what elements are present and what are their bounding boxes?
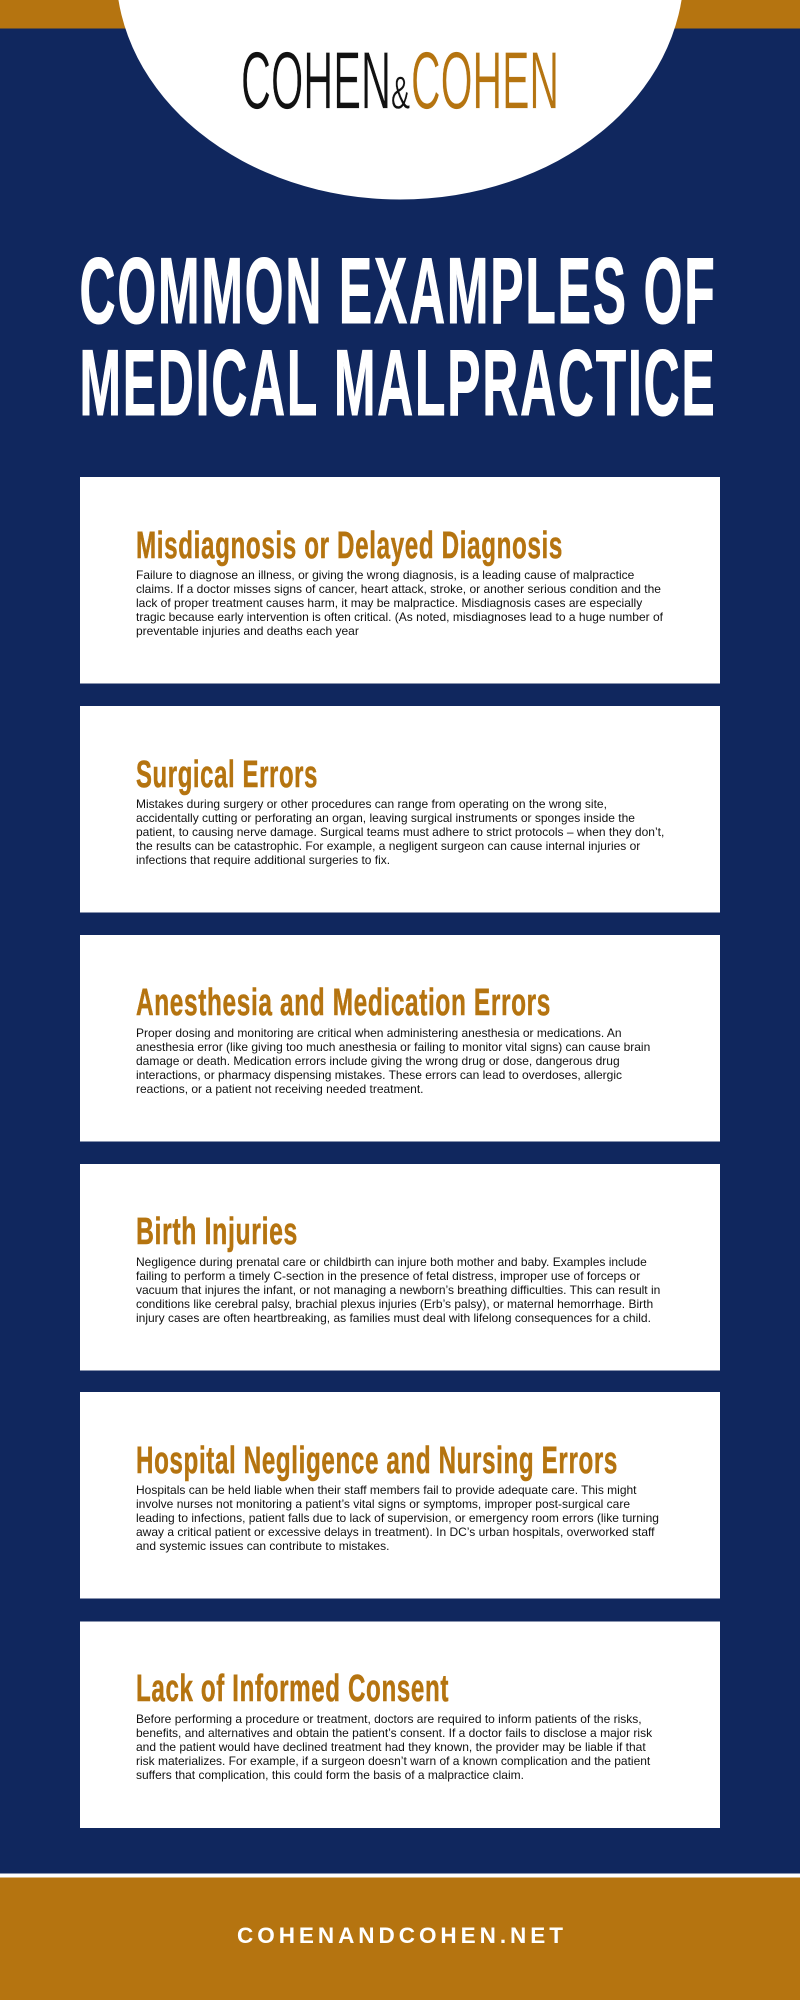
text: anesthesia — [136, 1026, 650, 1096]
text: hospital negligence: leading to infections, patient falls due to lack of supervision, or emergency room errors (like turning — [136, 1511, 659, 1525]
text: anesthesia: anesthesia error (like giving too much anesthesia or failing to monitor vital signs) can cause brain — [136, 1040, 650, 1054]
panel: misdiagnosis — [80, 477, 720, 684]
text: informed consent: risk materializes. For example, if a surgeon doesn’t warn of a known complication and the patient — [136, 1754, 651, 1768]
text: COHEN — [411, 36, 559, 126]
text: birth injuries — [136, 1255, 660, 1325]
heading: surgical errors: Surgical Errors — [136, 754, 318, 796]
logo: Cohen & Cohen: COHEN — [241, 36, 391, 126]
text: birth injuries: vacuum that injures the infant, or not managing a newborn’s breathing difficulties. This can result in — [136, 1283, 660, 1297]
text: misdiagnosis: tragic because early intervention is often critical. (As noted, misdiagnoses lead to a huge number of — [136, 610, 664, 624]
text: informed consent: and the patient would have declined treatment had they known, the provider may be liable if that — [136, 1740, 646, 1754]
text: hospital negligence: away a critical patient or excessive delays in treatment). In DC’s urban hospitals, overworked staff — [136, 1525, 655, 1539]
footer band — [0, 1874, 800, 2000]
text: anesthesia: interactions, or pharmacy dispensing mistakes. These errors can lead to overdoses, allergic — [136, 1068, 622, 1082]
heading: birth injuries: Birth Injuries — [136, 1211, 298, 1253]
heading: informed consent: Lack of Informed Consent — [136, 1668, 449, 1710]
top gold bar — [0, 0, 800, 28]
text: surgical errors: the results can be catastrophic. For example, a negligent surgeon can cause internal injuries or — [136, 839, 640, 853]
text: hospital negligence: Hospitals can be held liable when their staff members fail to provide adequate care. This might — [136, 1483, 637, 1497]
text: birth injuries: injury cases are often heartbreaking, as families must deal with lifelong consequences for a child. — [136, 1311, 651, 1325]
text: surgical errors: infections that require additional surgeries to fix. — [136, 853, 390, 867]
text: birth injuries: conditions like cerebral palsy, brachial plexus injuries (Erb’s palsy), or maternal hemorrhage. Birth — [136, 1297, 653, 1311]
panel: hospital negligence — [80, 1392, 720, 1598]
text: hospital negligence — [136, 1483, 659, 1553]
text: informed consent: Before performing a procedure or treatment, doctors are required to inform patients of the risks, — [136, 1712, 642, 1726]
title — [80, 238, 716, 435]
panel: anesthesia — [80, 935, 720, 1142]
text: surgical errors: accidentally cutting or perforating an organ, leaving surgical instruments or sponges inside the — [136, 811, 635, 825]
text: birth injuries: failing to perform a timely C-section in the presence of fetal distress, improper use of forceps or — [136, 1269, 640, 1283]
footer url: COHENANDCOHEN.NET — [237, 1923, 563, 1948]
panel: surgical errors — [80, 706, 720, 912]
text: informed consent: suffers that complication, this could form the basis of a malpractice claim. — [136, 1768, 524, 1782]
text: surgical errors — [136, 797, 664, 867]
logo: Cohen & Cohen: & — [391, 66, 410, 118]
text: misdiagnosis: lack of proper treatment causes harm, it may be malpractice. Misdiagnosis cases are especially — [136, 596, 642, 610]
text: anesthesia: damage or death. Medication errors include giving the wrong drug or dose, dangerous drug — [136, 1054, 620, 1068]
panel: birth injuries — [80, 1164, 720, 1370]
text: surgical errors: patient, to causing nerve damage. Surgical teams must adhere to strict protocols – when they don’t, — [136, 825, 664, 839]
text: hospital negligence: and systemic issues can contribute to mistakes. — [136, 1539, 389, 1553]
text: surgical errors: Mistakes during surgery or other procedures can range from operating on the wrong site, — [136, 797, 607, 811]
text: misdiagnosis: Failure to diagnose an illness, or giving the wrong diagnosis, is a leading cause of malpractice — [136, 568, 635, 582]
text: misdiagnosis — [136, 568, 664, 638]
text: informed consent — [136, 1712, 653, 1782]
heading: misdiagnosis: Misdiagnosis or Delayed Diagnosis — [136, 525, 563, 567]
heading: anesthesia: Anesthesia and Medication Errors — [136, 982, 551, 1024]
panel: informed consent — [80, 1622, 720, 1828]
text: hospital negligence: involve nurses not monitoring a patient’s vital signs or symptoms, improper post-surgical care — [136, 1497, 630, 1511]
text: birth injuries: Negligence during prenatal care or childbirth can injure both mother and baby. Examples include — [136, 1255, 647, 1269]
text: informed consent: benefits, and alternatives and obtain the patient’s consent. If a doctor fails to disclose a major risk — [136, 1726, 653, 1740]
text: misdiagnosis: claims. If a doctor misses signs of cancer, heart attack, stroke, or another serious condition and the — [136, 582, 661, 596]
text: anesthesia: Proper dosing and monitoring are critical when administering anesthesia or medications. An — [136, 1026, 622, 1040]
text: misdiagnosis: preventable injuries and deaths each year — [136, 624, 359, 638]
text: anesthesia: reactions, or a patient not receiving needed treatment. — [136, 1082, 424, 1096]
white logo ellipse — [116, 0, 684, 200]
